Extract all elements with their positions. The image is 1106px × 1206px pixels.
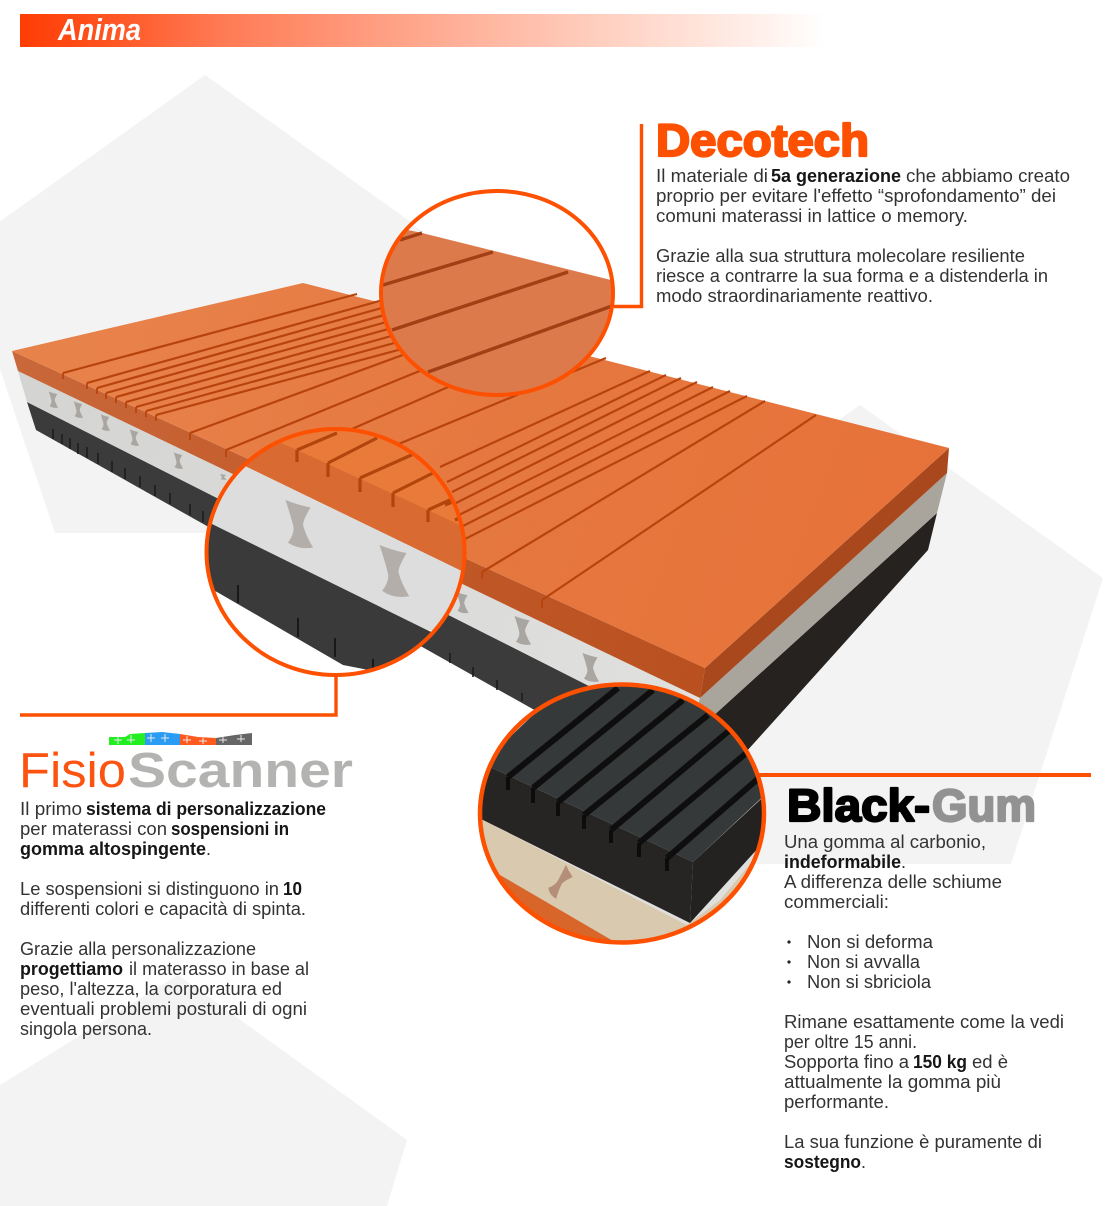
text block: FisioScanner description: peso, l'altezza, la corporatura ed bbox=[20, 979, 282, 999]
text block: FisioScanner description: gomma altospingente bbox=[20, 839, 206, 859]
connector: Decotech bbox=[614, 124, 642, 306]
logo color strip bbox=[109, 732, 252, 745]
text block: Decotech description: Il materiale di bbox=[656, 166, 768, 186]
text block: Black-Gum durability: La sua funzione è puramente di bbox=[784, 1132, 1042, 1152]
text block: FisioScanner description bbox=[20, 799, 326, 1039]
text block: Black-Gum durability: Rimane esattamente come la vedi bbox=[784, 1012, 1064, 1032]
header bar: Anima: Anima bbox=[57, 12, 141, 47]
bullet list: Non si avvalla bbox=[807, 952, 921, 972]
zoom circle: suspension layer bbox=[204, 427, 466, 677]
text block: FisioScanner description: Le sospensioni si distinguono in bbox=[20, 879, 279, 899]
text block: Black-Gum description: Una gomma al carbonio, bbox=[784, 832, 986, 852]
text block: Decotech description: Grazie alla sua struttura molecolare resiliente bbox=[656, 246, 1025, 266]
text block: Black-Gum durability: ed è bbox=[972, 1052, 1008, 1072]
logo: FisioScanner: Fisio bbox=[19, 744, 126, 798]
bullet list: Non si sbriciola bbox=[807, 972, 932, 992]
text block: Decotech description: proprio per evitare l'effetto “sprofondamento” dei bbox=[656, 186, 1056, 206]
bullet list bbox=[787, 932, 934, 992]
text block: FisioScanner description: progettiamo bbox=[20, 959, 123, 979]
connector: Black-Gum bbox=[758, 773, 1091, 777]
mattress bbox=[12, 283, 949, 803]
panel: FisioScanner bbox=[19, 732, 353, 1039]
text block: Black-Gum description: A differenza delle schiume bbox=[784, 872, 1002, 892]
black layer notches bbox=[53, 429, 522, 701]
text block: FisioScanner description: Grazie alla personalizzazione bbox=[20, 939, 256, 959]
text block: Decotech description: riesce a contrarre la sua forma e a distenderla in bbox=[656, 266, 1048, 286]
text block: Decotech description: 5a generazione bbox=[771, 166, 901, 186]
text block: Decotech description: che abbiamo creato bbox=[906, 166, 1070, 186]
black layer bbox=[27, 402, 937, 803]
logo: FisioScanner bbox=[19, 732, 353, 798]
panel: Decotech bbox=[656, 115, 1070, 306]
text block: FisioScanner description: singola persona. bbox=[20, 1019, 152, 1039]
text block: Black-Gum durability: . bbox=[861, 1152, 866, 1172]
logo: FisioScanner: Scanner bbox=[128, 744, 353, 798]
panel: Black-Gum bbox=[784, 780, 1064, 1172]
top surface grooves bbox=[63, 294, 816, 608]
text block: Black-Gum description: . bbox=[901, 852, 906, 872]
suspension holes bbox=[49, 392, 599, 682]
header bar: Anima bbox=[20, 12, 825, 47]
text block: FisioScanner description: sistema di personalizzazione bbox=[86, 799, 326, 819]
text block: FisioScanner description: eventuali problemi posturali di ogni bbox=[20, 999, 307, 1019]
text block: Decotech description bbox=[656, 166, 1070, 306]
heading: Black-Gum bbox=[787, 780, 1036, 831]
zoom circle: Black-Gum ribs bbox=[470, 680, 770, 960]
zoom circle: Decotech surface bbox=[360, 191, 615, 400]
heading: Decotech: Decotech bbox=[656, 115, 869, 166]
bullet list: Non si deforma bbox=[807, 932, 934, 952]
text block: Decotech description: comuni materassi in lattice o memory. bbox=[656, 206, 968, 226]
text block: Black-Gum durability: Sopporta fino a bbox=[784, 1052, 910, 1072]
text block: Black-Gum description bbox=[784, 832, 1002, 912]
text block: Black-Gum durability: attualmente la gomma più bbox=[784, 1072, 1001, 1092]
heading: Black-Gum: Black- bbox=[787, 780, 930, 831]
text block: Black-Gum description: commerciali: bbox=[784, 892, 889, 912]
text block: FisioScanner description: differenti colori e capacità di spinta. bbox=[20, 899, 306, 919]
text block: Black-Gum durability: 150 kg bbox=[913, 1052, 967, 1072]
heading: Black-Gum: Gum bbox=[932, 780, 1036, 831]
text block: Black-Gum description: indeformabile bbox=[784, 852, 901, 872]
white layer bbox=[18, 371, 947, 737]
text block: FisioScanner description: per materassi con bbox=[20, 819, 167, 839]
orange layer bbox=[12, 283, 949, 698]
text block: Decotech description: modo straordinariamente reattivo. bbox=[656, 286, 933, 306]
text block: FisioScanner description: sospensioni in bbox=[171, 819, 289, 839]
text block: Black-Gum durability bbox=[784, 1012, 1064, 1172]
text block: FisioScanner description: 10 bbox=[283, 879, 302, 899]
text block: FisioScanner description: il materasso in base al bbox=[129, 959, 309, 979]
text block: FisioScanner description: . bbox=[206, 839, 211, 859]
text block: Black-Gum durability: sostegno bbox=[784, 1152, 861, 1172]
text block: FisioScanner description: Il primo bbox=[20, 799, 82, 819]
text block: Black-Gum durability: performante. bbox=[784, 1092, 889, 1112]
connector: FisioScanner bbox=[20, 675, 336, 715]
text block: Black-Gum durability: per oltre 15 anni. bbox=[784, 1032, 917, 1052]
